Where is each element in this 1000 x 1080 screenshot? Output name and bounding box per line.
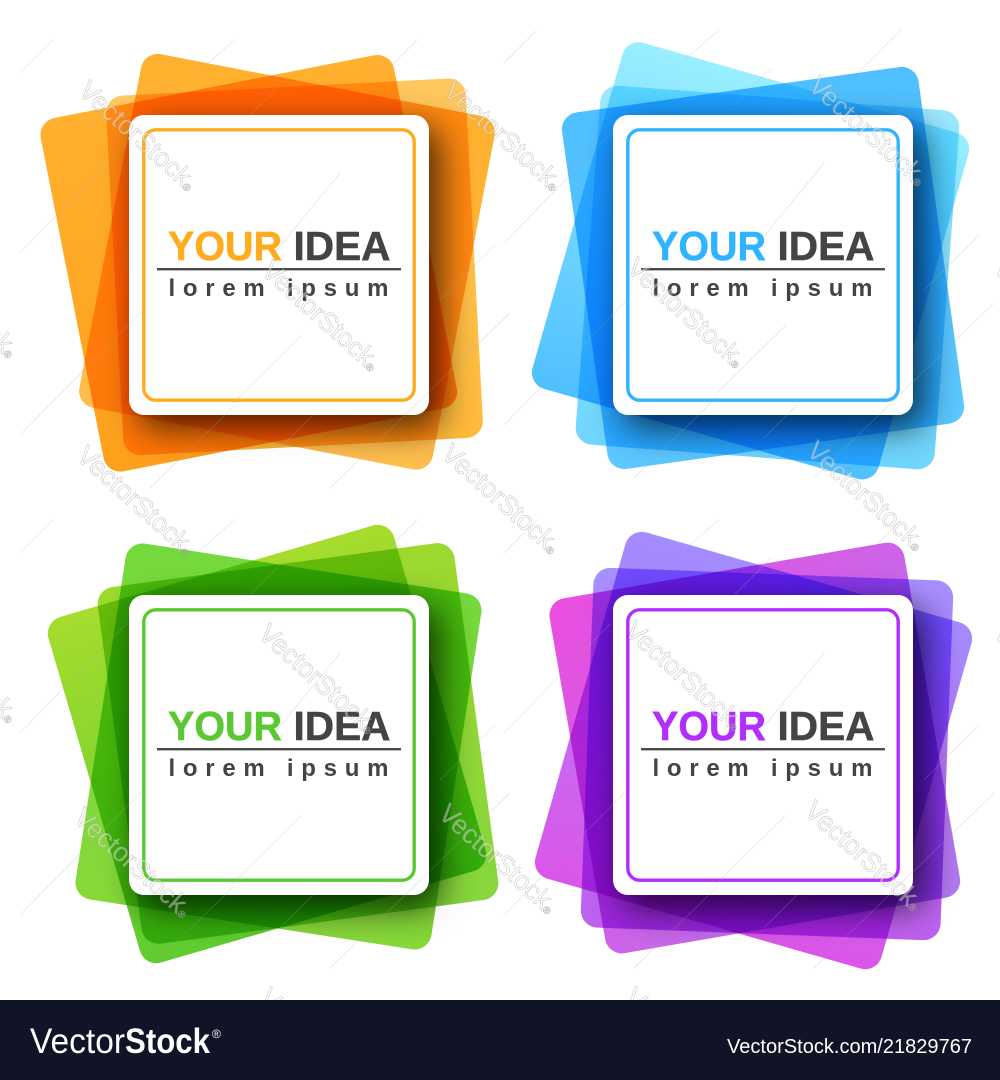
- watermarks: VectorStock®: [71, 440, 202, 562]
- purple heading: YOUR: [652, 703, 766, 749]
- orange subtitle: lorem ipsum: [168, 275, 388, 302]
- watermarks: VectorStock®: [799, 795, 930, 917]
- watermarks: VectorStock®: [68, 802, 199, 924]
- orange slightly tilted square: [105, 78, 484, 456]
- green heading rule: [157, 748, 401, 750]
- green slightly tilted square: [96, 541, 500, 946]
- watermarks: VectorStock®: [619, 615, 750, 737]
- orange white card: [129, 115, 429, 415]
- purple slightly tilted square: [580, 567, 954, 941]
- blue inner frame: [628, 130, 898, 400]
- green heading: YOUR: [168, 703, 282, 749]
- green heading: IDEA: [294, 703, 390, 749]
- watermarks: VectorStock®: [801, 435, 932, 557]
- orange heading rule: [157, 268, 401, 270]
- blue card shadow: [623, 127, 923, 427]
- footer logo: ®: [212, 1027, 221, 1041]
- watermarks: VectorStock®: [253, 618, 384, 740]
- watermarks: VectorStock®: [436, 438, 567, 560]
- green tilted square right: [73, 541, 484, 952]
- blue tilted square right: [528, 38, 973, 483]
- blue card faint outer shadow: [631, 135, 931, 435]
- purple card faint outer shadow: [631, 615, 931, 915]
- watermarks: VectorStock®: [73, 75, 204, 197]
- orange heading: [168, 223, 390, 269]
- purple inner frame: [628, 610, 898, 880]
- watermarks: VectorStock®: [433, 798, 564, 920]
- green inner frame: [144, 610, 414, 880]
- blue white card: [613, 115, 913, 415]
- footer logo: [30, 1022, 221, 1061]
- blue subtitle: lorem ipsum: [652, 275, 872, 302]
- green tilted square left: [44, 521, 490, 967]
- purple card shadow: [623, 607, 923, 907]
- purple white card: [613, 595, 913, 895]
- green heading: [168, 703, 390, 749]
- orange card faint outer shadow: [147, 135, 447, 435]
- purple tilted square right: [531, 528, 976, 973]
- orange card shadow: [139, 127, 439, 427]
- watermarks: VectorStock®: [803, 70, 934, 192]
- footer bar: [0, 1000, 1000, 1080]
- orange inner frame: [144, 130, 414, 400]
- purple tilted square left: [547, 540, 963, 956]
- blue slightly tilted square: [575, 85, 960, 470]
- orange heading: YOUR: [168, 223, 282, 269]
- blue heading rule: [641, 268, 885, 270]
- panel: purple frame: [531, 528, 976, 973]
- watermarks: VectorStock®: [621, 252, 752, 374]
- blue heading: YOUR: [652, 223, 766, 269]
- watermarks: VectorStock®: [438, 75, 569, 197]
- footer logo: Stock: [125, 1022, 210, 1061]
- panel: blue frame: [528, 38, 973, 483]
- footer logo: Vector: [30, 1022, 125, 1061]
- blue heading: IDEA: [778, 223, 874, 269]
- green card shadow: [139, 607, 439, 907]
- purple heading: [652, 703, 874, 749]
- orange tilted square right: [76, 51, 498, 473]
- purple subtitle: lorem ipsum: [652, 755, 872, 782]
- orange tilted square left: [38, 52, 460, 475]
- green white card: [129, 595, 429, 895]
- green card faint outer shadow: [147, 615, 447, 915]
- blue heading: [652, 223, 874, 269]
- green subtitle: lorem ipsum: [168, 755, 388, 782]
- panel: orange frame: [38, 51, 498, 475]
- purple heading: IDEA: [778, 703, 874, 749]
- footer image id: VectorStock.com/21829767: [727, 1036, 972, 1058]
- blue tilted square left: [560, 65, 966, 471]
- panel: green frame: [44, 521, 500, 967]
- watermarks: VectorStock®: [256, 255, 387, 377]
- orange heading: IDEA: [294, 223, 390, 269]
- purple heading rule: [641, 748, 885, 750]
